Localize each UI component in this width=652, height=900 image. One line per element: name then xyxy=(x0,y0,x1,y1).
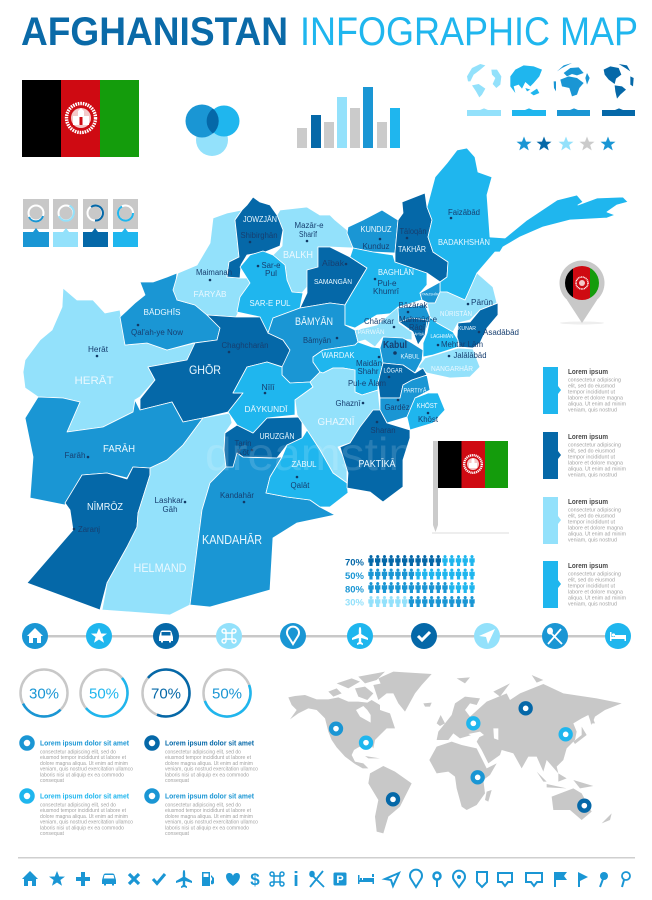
icon: fork and knife xyxy=(542,623,568,649)
map labels: provinces: LAGHMĀN xyxy=(430,333,454,340)
text block 4: tempor incididunt ut xyxy=(568,584,616,590)
bullet 2 xyxy=(146,738,258,784)
text block 2: veniam, quis nostrud xyxy=(568,472,617,478)
icon: tilted pin outline xyxy=(622,872,630,887)
icon: navigation arrow xyxy=(474,623,500,649)
title xyxy=(21,10,638,54)
venn diagram xyxy=(186,104,240,156)
region: Bamyan xyxy=(268,303,358,383)
icon: navigation arrow xyxy=(385,873,399,886)
text block 1: Lorem ipsum xyxy=(568,369,608,376)
map labels: cities: Tāloqān xyxy=(400,227,426,236)
bullet 1: eiusmod tempor incididunt ut labore et xyxy=(40,755,126,761)
region: Farah xyxy=(25,397,203,505)
icon: plus xyxy=(76,872,90,886)
map labels: cities: Qal'ah-ye Now xyxy=(131,328,183,337)
map labels: provinces: SAMANGĀN xyxy=(314,278,352,286)
Arctic islands xyxy=(328,672,387,700)
bullet 4: laboris nisi ut aliquip ex ea commodo xyxy=(165,825,249,831)
region: Laghman xyxy=(423,317,458,357)
map labels: cities: Gardēz xyxy=(384,403,410,412)
map labels: cities: Faizābād xyxy=(448,208,480,217)
map labels: cities: Kabul xyxy=(383,340,407,351)
text block 1 xyxy=(543,367,627,414)
map labels: cities: Sharan xyxy=(370,426,396,435)
map labels: provinces: BĀDGHĪS xyxy=(144,308,180,317)
icon: pin outline xyxy=(410,870,422,887)
map labels: provinces: BALKH xyxy=(283,250,313,261)
bullet 4: consectetur adipiscing elit, sed do xyxy=(165,802,241,808)
map labels: provinces: PANJSHĪR xyxy=(422,292,439,296)
map labels: cities: Nīlī xyxy=(262,383,275,392)
Black Sea and Caspian xyxy=(468,728,498,740)
map labels: cities: Mazār-e xyxy=(294,221,324,230)
icon: home xyxy=(22,871,38,886)
region: Ghazni xyxy=(295,368,380,483)
bullet 4: consequat xyxy=(165,831,190,837)
region: Herat xyxy=(23,288,195,432)
icon: info: i xyxy=(293,869,299,891)
map labels: cities: Kunduz xyxy=(362,242,390,251)
gauge 70% xyxy=(133,660,199,726)
map labels: cities: Farāh xyxy=(64,451,86,460)
map labels: cities: Bāmyān xyxy=(303,336,331,345)
map labels: cities: Aībak xyxy=(322,259,345,268)
icon: fork and knife xyxy=(309,871,324,887)
bullet 2: laboris nisi ut aliquip ex ea commodo xyxy=(165,772,249,778)
icon: car xyxy=(153,623,179,649)
icon: globe 1 xyxy=(467,64,501,97)
icon: star xyxy=(49,871,65,886)
circular gauges xyxy=(11,660,257,726)
region: Wardak xyxy=(313,342,383,395)
map labels: provinces: ZĀBUL xyxy=(292,460,317,469)
text block 3: aliqua. Ut enim ad minim xyxy=(568,532,627,538)
map labels: provinces: DĀYKUNDĪ xyxy=(244,405,288,414)
map labels: cities: Jalālābād xyxy=(454,351,486,360)
icon: flag xyxy=(554,872,567,887)
bottom divider xyxy=(18,857,635,858)
map labels: cities: Mehtar Lām xyxy=(441,340,483,349)
text block 4: aliqua. Ut enim ad minim xyxy=(568,596,627,602)
people chart: 70% xyxy=(345,558,365,568)
Greenland xyxy=(378,672,432,712)
map labels: cities: Maidān xyxy=(356,359,382,368)
region: Kandahar xyxy=(190,453,335,607)
icon: check xyxy=(411,623,437,649)
bullet 3: consequat xyxy=(40,831,65,837)
gauge 50%: 50% xyxy=(89,686,119,702)
map labels: cities: Bāzārak xyxy=(398,301,428,310)
bullet 1: consectetur adipiscing elit, sed do xyxy=(40,750,116,756)
icon: cross xyxy=(129,874,139,884)
map labels: provinces xyxy=(74,215,490,575)
icon: pin xyxy=(280,623,306,649)
map labels: provinces: BĀMYĀN xyxy=(295,316,333,328)
bullet 3 xyxy=(22,790,133,837)
map labels: provinces: KANDAHĀR xyxy=(202,532,262,547)
bar chart xyxy=(297,87,400,148)
text block 1: elit, sed do eiusmod xyxy=(568,384,615,390)
region: Daykundi xyxy=(228,362,313,433)
region: Faryab xyxy=(173,210,253,317)
bullet 2: dolore magna aliqua. Ut enim ad minim xyxy=(165,761,254,767)
icon: pennant xyxy=(578,872,588,887)
map labels: provinces: HERĀT xyxy=(74,375,114,387)
bullet 1: veniam, quis nostrud exercitation ullamco xyxy=(40,767,133,773)
text block 3: veniam, quis nostrud xyxy=(568,538,617,544)
icon: command xyxy=(270,872,284,886)
panel: right text blocks xyxy=(543,367,627,608)
gauge 70%: 70% xyxy=(151,686,181,702)
icon: globe 3 xyxy=(554,63,590,96)
text block 3: labore et dolore magna xyxy=(568,526,623,532)
text block 2: tempor incididunt ut xyxy=(568,454,616,460)
flag on pole xyxy=(432,441,509,534)
text block 1: veniam, quis nostrud xyxy=(568,408,617,414)
text block 2: elit, sed do eiusmod xyxy=(568,448,615,454)
icon: speech bubble xyxy=(498,873,512,886)
map labels: cities: Pul-e xyxy=(378,279,397,288)
map labels: cities: Khumrī xyxy=(373,287,400,296)
bullet 2: consectetur adipiscing elit, sed do xyxy=(165,750,241,756)
map labels: provinces: TAKHĀR xyxy=(398,245,426,254)
text block 4: labore et dolore magna xyxy=(568,590,623,596)
icon: parking: P xyxy=(336,874,344,886)
title: AFGHANISTAN xyxy=(21,10,288,54)
bullet 3: Lorem ipsum dolor sit amet xyxy=(40,792,130,800)
bullet 3: consectetur adipiscing elit, sed do xyxy=(40,802,116,808)
region: Jowzjan xyxy=(227,197,283,278)
Japan xyxy=(573,727,587,744)
icon: parking xyxy=(334,872,346,886)
map labels: cities: Kōt xyxy=(237,448,250,457)
gauge 50% second: 50% xyxy=(212,686,242,702)
British Isles xyxy=(437,715,445,726)
map labels: cities: Shibirghān xyxy=(240,231,278,240)
map labels: provinces: URUZGĀN xyxy=(260,432,295,441)
map labels: cities: Lashkar xyxy=(154,496,184,505)
map labels: provinces: FARĀH xyxy=(103,443,135,455)
map labels: provinces: NANGARHĀR xyxy=(431,365,473,373)
map labels: provinces: NŪRISTĀN xyxy=(440,310,472,318)
text block 4: consectetur adipiscing xyxy=(568,572,621,578)
map labels: cities: Qalāt xyxy=(290,481,310,490)
people chart: 80% xyxy=(345,584,365,596)
gauge 30%: 30% xyxy=(29,686,59,702)
region: Paktya xyxy=(380,375,430,423)
text block 2: labore et dolore magna xyxy=(568,460,623,466)
map labels: provinces: FĀRYĀB xyxy=(194,290,226,299)
bullet 4 xyxy=(146,790,258,837)
map labels: cities: Herāt xyxy=(88,345,109,354)
text block 3 xyxy=(543,497,627,544)
map labels: provinces: KHŌST xyxy=(416,402,438,410)
icon: car xyxy=(102,874,116,886)
bottom icon row xyxy=(22,869,630,891)
icon: plane xyxy=(176,870,192,888)
map labels: provinces: BADAKHSHĀN xyxy=(438,238,490,247)
region: Logar xyxy=(378,363,427,398)
icon: home xyxy=(22,623,48,649)
globes xyxy=(467,63,635,116)
icon: globe 4 xyxy=(604,64,634,99)
bullet 3: eiusmod tempor incididunt ut labore et xyxy=(40,808,126,814)
map labels: cities: Chārīkar xyxy=(364,317,394,326)
map labels: cities: Shahr xyxy=(358,367,379,376)
bullet 4: veniam, quis nostrud exercitation ullamco xyxy=(165,820,258,826)
region: Parwan xyxy=(355,307,412,347)
icon: bed xyxy=(358,874,374,884)
map labels: cities: Asadābād xyxy=(483,328,519,337)
region: Khost xyxy=(407,393,445,430)
region: Ghor xyxy=(140,315,290,422)
map labels: cities: Pārūn xyxy=(471,298,493,307)
map labels: cities: Pul xyxy=(265,269,277,278)
region: Paktika xyxy=(340,410,410,502)
icon: bed xyxy=(605,623,631,649)
people chart xyxy=(345,555,475,608)
map labels: provinces: PARWĀN xyxy=(358,329,384,336)
text block 1: labore et dolore magna xyxy=(568,396,623,402)
icon: globe 2 xyxy=(510,65,542,95)
icon: target pin xyxy=(453,871,465,887)
map of Afghanistan xyxy=(23,148,628,615)
map labels: provinces: WARDAK xyxy=(322,351,355,360)
South America xyxy=(368,766,412,833)
region: Uruzgan xyxy=(224,417,302,467)
region: Kapisa xyxy=(399,318,427,345)
panel: lorem ipsum bullets xyxy=(22,738,258,837)
map labels: provinces: KUNAR xyxy=(458,326,476,332)
bullet 1: dolore magna aliqua. Ut enim ad minim xyxy=(40,761,129,767)
region: Kunduz xyxy=(347,210,398,253)
text block 2 xyxy=(543,432,627,479)
map labels: cities: Sar-e xyxy=(262,261,281,270)
icon: marker xyxy=(477,872,487,887)
watermark: dreamstime xyxy=(205,428,455,480)
map labels: provinces: GHŌR xyxy=(189,363,221,377)
globe base bars xyxy=(467,108,635,116)
map labels: cities: Zaranj xyxy=(78,525,100,534)
Hudson Bay xyxy=(356,706,371,723)
map labels: provinces: SAR-E PUL xyxy=(250,299,291,308)
Islands xyxy=(537,772,593,788)
map labels: provinces: PAKTĪKĀ xyxy=(358,458,396,470)
bullet 3: laboris nisi ut aliquip ex ea commodo xyxy=(40,825,124,831)
text block 2: consectetur adipiscing xyxy=(568,442,621,448)
Northern islands xyxy=(457,675,543,697)
world map xyxy=(288,672,622,833)
map labels: cities xyxy=(64,208,519,534)
map labels: provinces: JOWZJĀN xyxy=(243,215,277,224)
map labels: cities: Maimanah xyxy=(196,268,232,277)
map labels: provinces: LŌGAR xyxy=(384,366,403,374)
timeline icon row xyxy=(22,623,631,649)
bullet 4: Lorem ipsum dolor sit amet xyxy=(165,792,255,800)
icon: heart xyxy=(226,873,240,886)
icon: plane xyxy=(347,623,373,649)
map labels: provinces: NĪMRŌZ xyxy=(87,501,123,513)
bullet 4: eiusmod tempor incididunt ut labore et xyxy=(165,808,251,814)
map pin with flag xyxy=(560,260,604,324)
map labels: provinces: KĀPĪSĀ xyxy=(412,332,424,336)
text block 2: Lorem ipsum xyxy=(568,434,608,441)
map labels: cities: Ghaznī xyxy=(336,399,361,408)
region: Nangarhar xyxy=(418,348,480,378)
text block 4: Lorem ipsum xyxy=(568,563,608,570)
bullet 2: eiusmod tempor incididunt ut labore et xyxy=(165,755,251,761)
gauge 50% second xyxy=(197,663,257,723)
region: Samangan xyxy=(300,247,367,308)
map labels: cities: Sharīf xyxy=(299,230,318,239)
text block 4: veniam, quis nostrud xyxy=(568,602,617,608)
region: Takhar xyxy=(395,193,448,282)
text block 3: Lorem ipsum xyxy=(568,499,608,506)
people chart: 30% xyxy=(345,598,365,608)
map labels: cities: Mahmūd-e xyxy=(399,315,438,324)
bullet 1 xyxy=(22,738,133,784)
region: Badakhshan xyxy=(427,148,628,300)
region: Kunar xyxy=(457,303,498,348)
Caribbean xyxy=(365,756,380,758)
map labels: cities: Tarin xyxy=(234,439,252,448)
map labels: cities: Kandahār xyxy=(220,491,254,500)
map labels: cities: Chaghcharān xyxy=(222,341,268,350)
text block 1: tempor incididunt ut xyxy=(568,390,616,396)
bullet 3: veniam, quis nostrud exercitation ullamco xyxy=(40,820,133,826)
region: Helmand xyxy=(102,413,232,615)
flag of Afghanistan xyxy=(22,80,139,157)
icon: command xyxy=(216,623,242,649)
icon: check xyxy=(153,874,165,884)
text block 2: aliqua. Ut enim ad minim xyxy=(568,466,627,472)
region: Zabul xyxy=(266,430,348,507)
map labels: cities: Rāqī xyxy=(409,323,426,332)
region: Bazarak block xyxy=(398,305,430,332)
map labels: provinces: GHAZNĪ xyxy=(318,416,355,428)
bullet 2: veniam, quis nostrud exercitation ullamco xyxy=(165,767,258,773)
region: Nimroz xyxy=(27,467,150,610)
world pins xyxy=(331,703,589,811)
region: Balkh xyxy=(273,207,353,293)
icon: wide speech bubble xyxy=(526,873,542,886)
gauge 50% xyxy=(71,660,137,726)
small gauge tiles xyxy=(23,199,138,247)
map labels: provinces: BAGHLĀN xyxy=(378,268,414,277)
Eurasia xyxy=(437,684,622,773)
text block 3: tempor incididunt ut xyxy=(568,520,616,526)
map labels: cities: Gāh xyxy=(162,505,178,514)
North America xyxy=(288,695,395,768)
region: Nuristan xyxy=(427,273,497,332)
star rating xyxy=(516,136,616,150)
region: Panjshir tail xyxy=(420,282,440,303)
region: Sar-e Pul xyxy=(237,251,303,333)
map labels: cities: Pul-e Ālam xyxy=(348,379,386,388)
region: Kabul xyxy=(380,337,423,373)
map labels: provinces: HELMAND xyxy=(134,561,187,575)
text block 1: aliqua. Ut enim ad minim xyxy=(568,402,627,408)
text block 3: elit, sed do eiusmod xyxy=(568,514,615,520)
bullet 3: dolore magna aliqua. Ut enim ad minim xyxy=(40,814,129,820)
region: Baghlan xyxy=(345,248,427,328)
people chart: 50% xyxy=(345,571,365,582)
bullet 2: Lorem ipsum dolor sit amet xyxy=(165,738,255,748)
region: Badghis xyxy=(120,273,220,350)
gauge 30% xyxy=(11,660,77,726)
icon: tilted pin xyxy=(600,872,608,887)
map labels: provinces: PARTIYĀ xyxy=(404,386,427,394)
bullet 2: consequat xyxy=(165,778,190,784)
Australia xyxy=(552,788,592,820)
Africa xyxy=(429,742,497,810)
text block 4 xyxy=(543,561,627,608)
map labels: provinces: KUNDUZ xyxy=(360,225,392,234)
icon: star xyxy=(86,623,112,649)
map labels: cities: Khōst xyxy=(418,415,439,424)
bullet 1: laboris nisi ut aliquip ex ea commodo xyxy=(40,772,124,778)
bullet 1: Lorem ipsum dolor sit amet xyxy=(40,738,130,748)
bullet 4: dolore magna aliqua. Ut enim ad minim xyxy=(165,814,254,820)
text block 3: consectetur adipiscing xyxy=(568,508,621,514)
icon: dollar: $ xyxy=(250,870,260,889)
icon: small pin xyxy=(434,872,440,887)
text block 4: elit, sed do eiusmod xyxy=(568,578,615,584)
text block 1: consectetur adipiscing xyxy=(568,378,621,384)
map labels: provinces: KĀBUL xyxy=(400,352,420,360)
bullet 1: consequat xyxy=(40,778,65,784)
icon: fuel xyxy=(202,872,214,886)
